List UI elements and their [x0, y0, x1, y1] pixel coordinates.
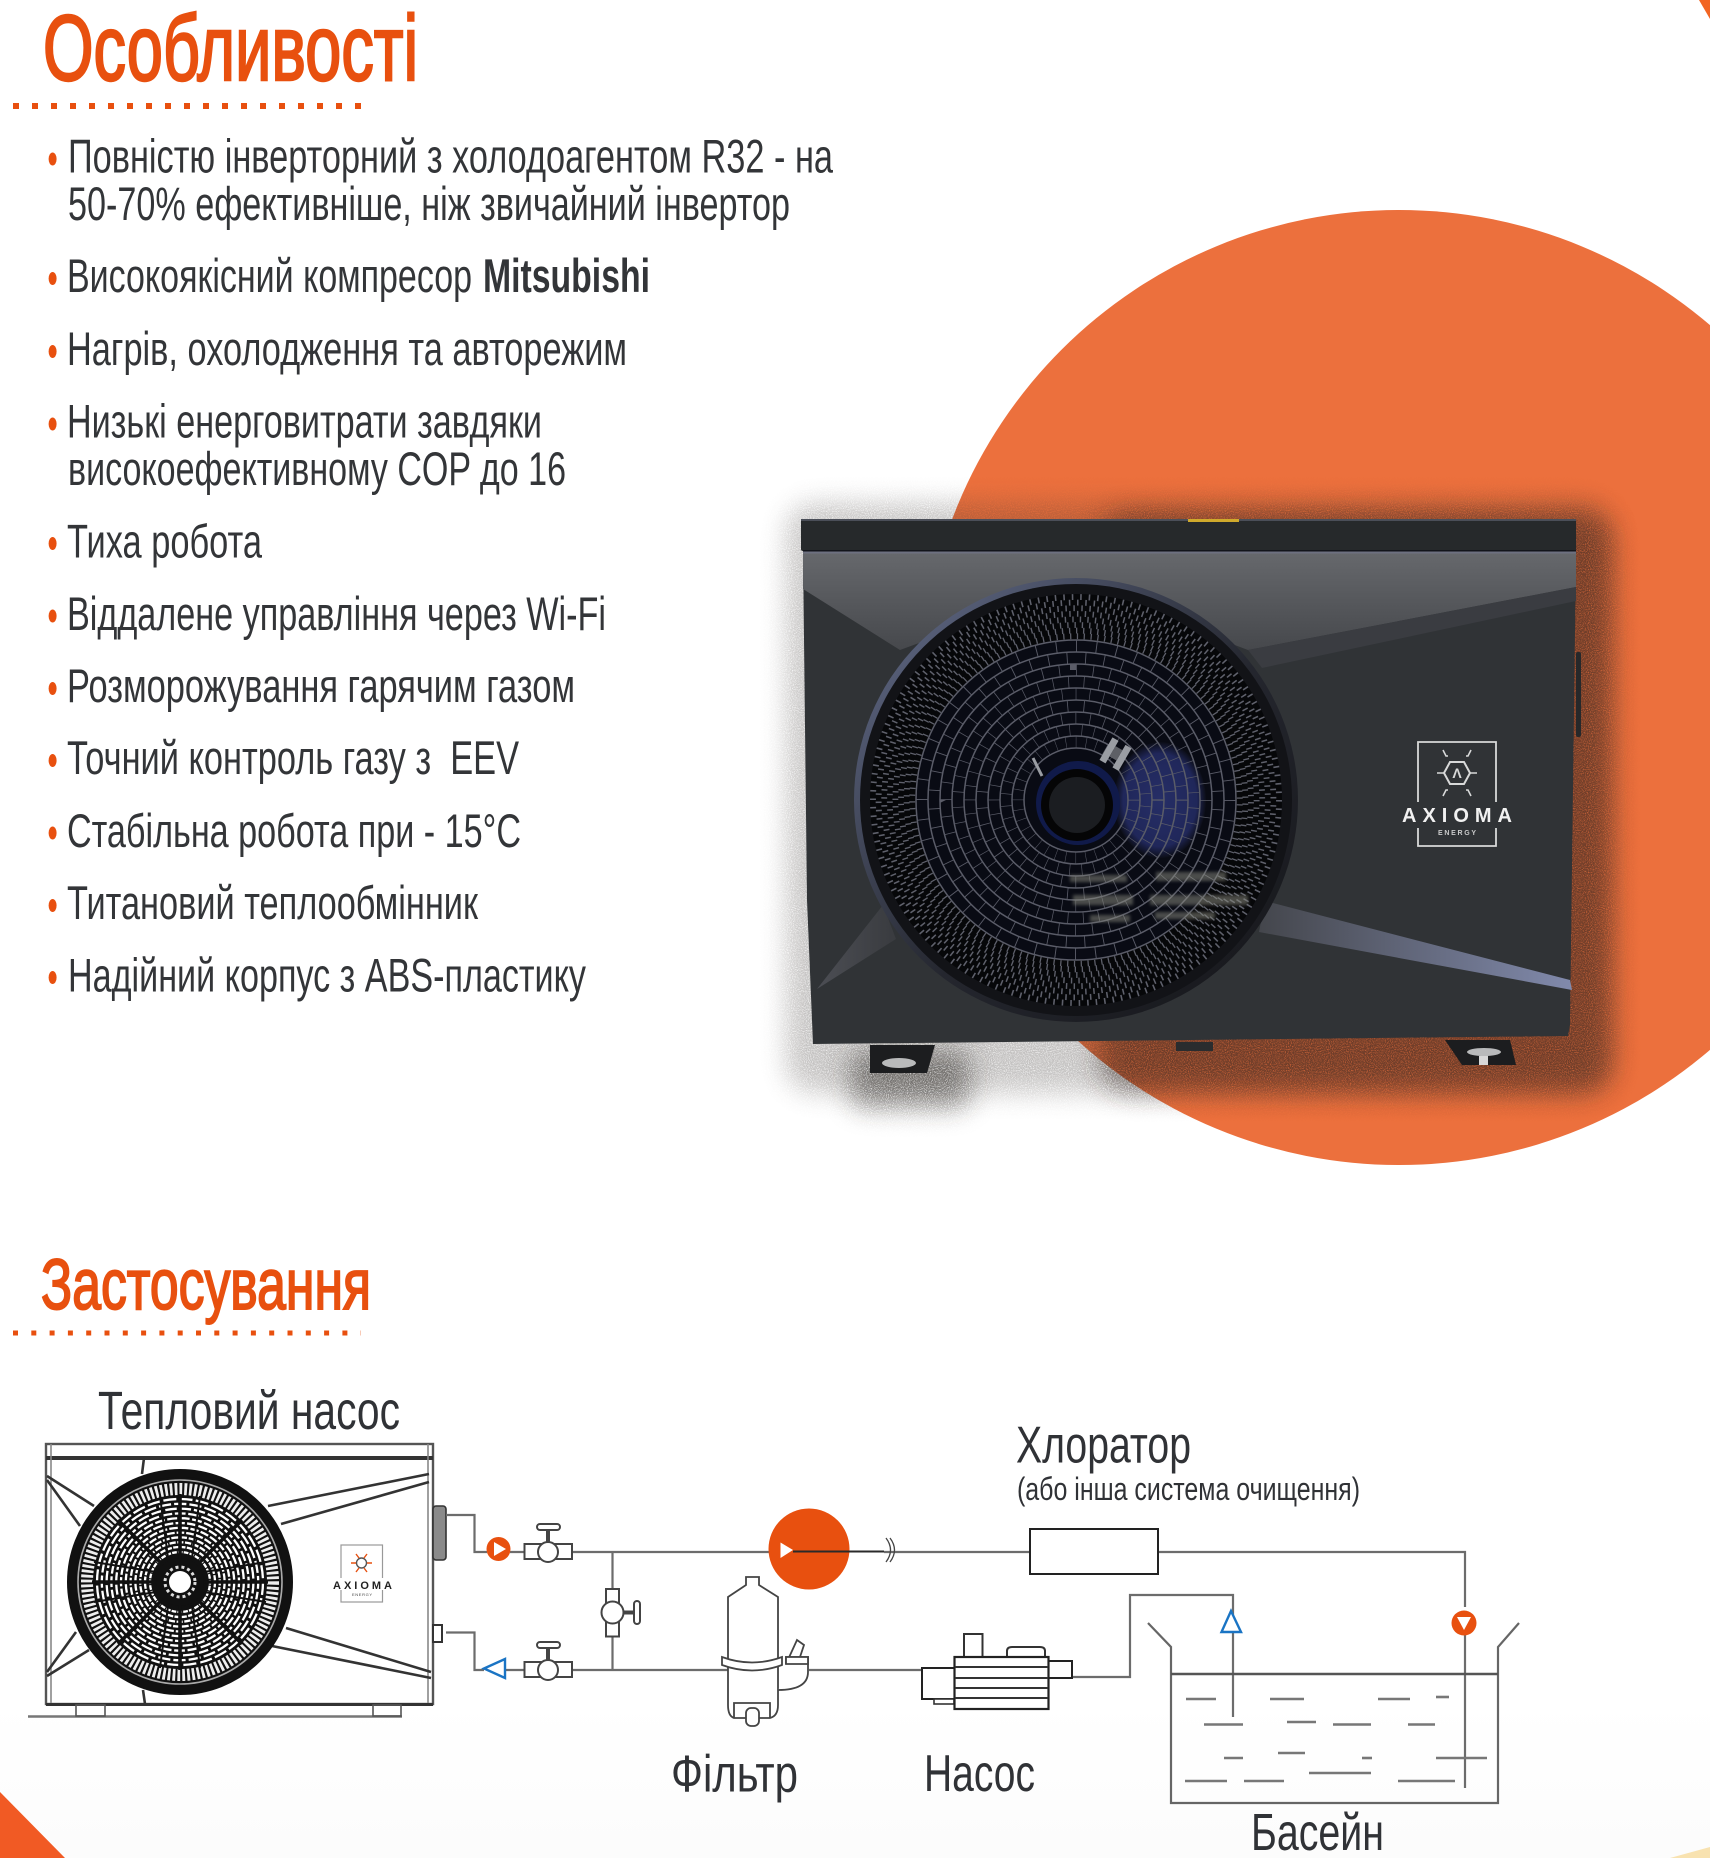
feature: abs case: Надійний корпус з ABS-пластику — [68, 948, 586, 1002]
water dashes — [1185, 1697, 1487, 1781]
feature: defrost: Розморожування гарячим газом — [67, 659, 575, 712]
small logo — [332, 1545, 392, 1602]
icon: lower valve — [524, 1642, 572, 1680]
logo: axioma energy — [1402, 742, 1512, 846]
feature: eev: Точний контроль газу з EEV — [67, 731, 519, 784]
top right corner accent — [1699, 0, 1710, 19]
label: filter: Фільтр — [671, 1746, 798, 1804]
feature: compressor: Mitsubishi — [483, 249, 650, 302]
bottom right corner accent — [1670, 1847, 1710, 1858]
icon: inlet flow arrow — [484, 1659, 505, 1678]
panel: feature list — [49, 130, 834, 1002]
feature: low energy use: Низькі енерговитрати завдяки — [67, 394, 542, 448]
logo: axioma energy: ENERGY — [1438, 830, 1476, 837]
icon: pool — [1148, 1623, 1519, 1803]
fan grille — [854, 578, 1298, 1022]
label: chlorinator: (або інша система очищення) — [1017, 1471, 1360, 1507]
feature: titanium: Титановий теплообмінник — [67, 876, 478, 929]
icon: pool return marker — [1452, 1610, 1476, 1636]
logo: axioma energy: Λ — [1452, 765, 1462, 781]
feature: quiet: Тиха робота — [67, 514, 263, 568]
small logo: AXIOMA — [333, 1580, 392, 1592]
feature: compressor: Високоякісний компресор — [67, 249, 472, 302]
bottom left corner accent — [0, 1792, 65, 1858]
label: chlorinator: Хлоратор — [1016, 1416, 1191, 1474]
feature: full inverter: 50-70% ефективніше, ніж звичайний інвертор — [68, 177, 790, 230]
feature: modes: Нагрів, охолодження та авторежим — [67, 322, 627, 375]
pipes: main circuit — [446, 1515, 1465, 1788]
feature: stable operation: Стабільна робота при - 15°C — [67, 804, 521, 857]
icon: circulation pump — [922, 1634, 1072, 1709]
icon: upper valve — [524, 1524, 572, 1562]
label: chlorinator — [1016, 1416, 1360, 1507]
feature: full inverter: Повністю інверторний з холодоагентом R32 - на — [68, 130, 834, 182]
label: heat pump: Тепловий насос — [98, 1381, 400, 1441]
page background — [0, 1700, 1710, 1858]
feature: wi-fi: Віддалене управління через Wi-Fi — [67, 587, 606, 640]
label: pump: Насос — [924, 1745, 1035, 1803]
product: heat pump unit — [786, 503, 1612, 1108]
icon: filter — [722, 1577, 808, 1726]
schematic: heat pump drawing — [28, 1444, 446, 1716]
icon: bypass valve — [602, 1589, 640, 1636]
icon: outlet flow marker — [486, 1537, 510, 1561]
logo: axioma energy: AXIOMA — [1402, 805, 1512, 827]
feature: low energy use — [49, 394, 566, 495]
feet — [870, 1040, 1516, 1073]
feature: full inverter — [49, 130, 834, 230]
feature: low energy use: високоефективному COP до 16 — [68, 442, 566, 495]
small logo: ENERGY — [352, 1592, 372, 1597]
heading: application: Застосування — [41, 1246, 371, 1325]
icon: circulation marker — [768, 1508, 894, 1590]
orange circle behind product — [922, 210, 1710, 1165]
feature: quiet — [49, 514, 263, 568]
icon: chlorinator box — [1030, 1529, 1158, 1574]
icon: pool intake arrow — [1222, 1611, 1241, 1632]
